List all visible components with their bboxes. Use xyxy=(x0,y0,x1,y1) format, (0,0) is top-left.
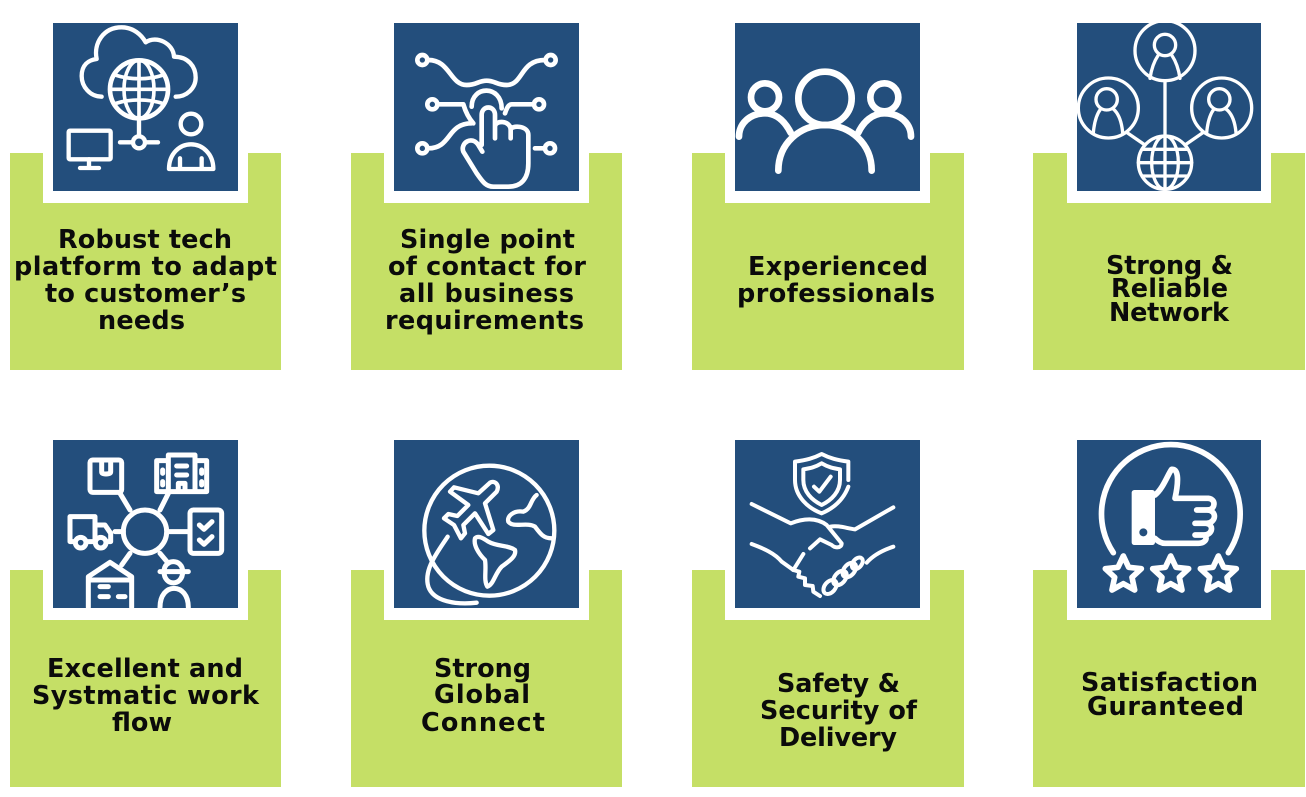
label xyxy=(385,225,586,336)
icon: pointing hand with circuit nodes xyxy=(417,55,556,187)
label: Reliable xyxy=(1111,274,1228,304)
card: excellent workflow xyxy=(10,440,281,787)
white notch xyxy=(1067,140,1271,203)
label: to customer’s xyxy=(45,279,246,309)
label: Experienced xyxy=(748,252,928,282)
label xyxy=(760,669,918,753)
navy icon tile xyxy=(53,440,238,608)
label: professionals xyxy=(737,279,935,309)
label: requirements xyxy=(385,306,584,336)
icon: logistics hub xyxy=(70,455,222,607)
label: platform to adapt xyxy=(14,252,277,282)
white notch xyxy=(384,557,589,620)
label: Global xyxy=(434,680,530,710)
white notch xyxy=(725,140,930,203)
card: safety and security of delivery xyxy=(692,440,964,787)
icon: three people xyxy=(739,72,911,171)
label: Satisfaction xyxy=(1081,668,1258,698)
label xyxy=(14,225,277,336)
label: Robust tech xyxy=(58,225,232,255)
label xyxy=(32,654,260,738)
label: Single point xyxy=(400,225,575,255)
white notch xyxy=(43,557,248,620)
green panel xyxy=(1033,153,1305,370)
icon: shield and handshake xyxy=(752,454,893,597)
label xyxy=(421,654,545,738)
label: Delivery xyxy=(779,723,897,753)
label xyxy=(1081,668,1258,722)
icon: people connected to globe xyxy=(1078,21,1252,189)
label: all business xyxy=(399,279,574,309)
label: flow xyxy=(112,708,172,738)
white notch xyxy=(384,140,589,203)
card: satisfaction guaranteed xyxy=(1033,440,1305,787)
label: Strong xyxy=(434,654,531,684)
label: Network xyxy=(1109,298,1230,328)
green panel xyxy=(10,570,281,787)
green panel xyxy=(351,153,622,370)
white notch xyxy=(43,140,248,203)
label xyxy=(737,252,935,309)
green panel xyxy=(1033,570,1305,787)
icon: thumbs up with stars xyxy=(1101,445,1240,590)
label: Strong & xyxy=(1106,251,1233,281)
navy icon tile xyxy=(53,23,238,191)
label: Excellent and xyxy=(47,654,243,684)
green panel xyxy=(351,570,622,787)
card: strong global connect xyxy=(351,440,622,787)
navy icon tile xyxy=(394,23,579,191)
card: single point of contact xyxy=(351,23,622,370)
navy icon tile xyxy=(735,440,920,608)
card: experienced professionals xyxy=(692,23,964,370)
icon: cloud globe monitor and person xyxy=(69,27,213,169)
card: robust tech platform xyxy=(10,23,281,370)
white notch xyxy=(725,557,930,620)
green panel xyxy=(10,153,281,370)
label: Security of xyxy=(760,696,918,726)
icon: globe with plane xyxy=(424,466,554,603)
navy icon tile xyxy=(394,440,579,608)
label: of contact for xyxy=(388,252,586,282)
label: Safety & xyxy=(777,669,900,699)
green panel xyxy=(692,153,964,370)
card: strong and reliable network xyxy=(1033,21,1305,370)
navy icon tile xyxy=(1077,23,1261,191)
label: Systmatic work xyxy=(32,681,260,711)
navy icon tile xyxy=(1077,440,1261,608)
green panel xyxy=(692,570,964,787)
white notch xyxy=(1067,557,1271,620)
label: needs xyxy=(98,306,185,336)
label: Connect xyxy=(421,708,545,738)
navy icon tile xyxy=(735,23,920,191)
label xyxy=(1106,251,1233,328)
label: Guranteed xyxy=(1087,692,1244,722)
